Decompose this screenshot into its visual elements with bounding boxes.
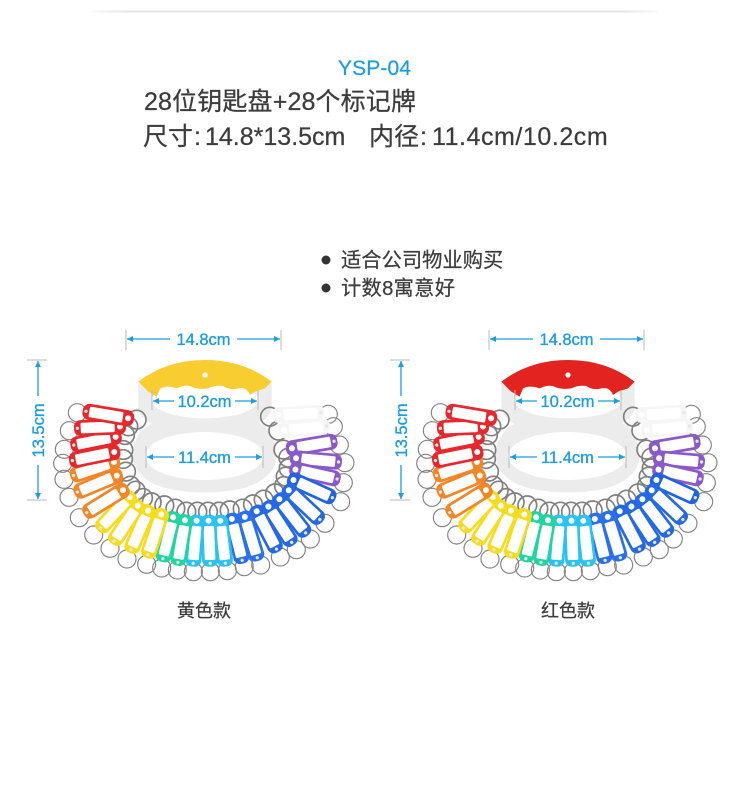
dimension: inner 10.2cm	[515, 390, 621, 411]
bullet: lucky number 8: 计数8寓意好	[341, 277, 455, 300]
product: yellow key tray	[27, 330, 354, 581]
top divider line	[92, 10, 658, 12]
dimension: width 14.8cm	[126, 330, 281, 350]
caption: red version: 红色款	[541, 601, 595, 621]
dimension: inner 11.4cm	[509, 446, 626, 468]
product description line: 28位钥匙盘+28个标记牌	[144, 88, 416, 116]
size specification line: 内径	[369, 123, 419, 151]
icon: red handle	[501, 360, 635, 397]
dimension: height 13.5cm: 13.5cm	[393, 403, 411, 458]
product: red key tray	[390, 330, 717, 581]
dimension: height 13.5cm	[27, 360, 48, 500]
size specification line: 11.4cm/10.2cm	[432, 123, 608, 151]
size specification line: :	[420, 123, 427, 151]
dimension: inner 10.2cm: 10.2cm	[540, 393, 595, 411]
size specification line: 尺寸	[143, 123, 193, 151]
dimension: inner 11.4cm	[146, 446, 263, 468]
dimension: height 13.5cm: 13.5cm	[30, 403, 48, 458]
dimension: inner 11.4cm: 11.4cm	[178, 449, 231, 467]
dimension: height 13.5cm	[390, 360, 411, 500]
dimension: width 14.8cm: 14.8cm	[176, 331, 231, 349]
key tags and plate	[417, 382, 717, 581]
model number: YSP-04	[338, 57, 411, 80]
dimension: width 14.8cm	[489, 330, 644, 350]
size specification line: 14.8*13.5cm	[205, 123, 345, 151]
dimension: inner 10.2cm: 10.2cm	[177, 393, 232, 411]
caption: yellow version: 黄色款	[177, 601, 231, 621]
bullet: suitable for companies: 适合公司物业购买	[341, 249, 503, 272]
icon: yellow handle	[138, 360, 272, 397]
dimension: width 14.8cm: 14.8cm	[539, 331, 594, 349]
dimension: inner 11.4cm: 11.4cm	[541, 449, 594, 467]
key tags and plate	[54, 382, 354, 581]
dimension: inner 10.2cm	[152, 390, 258, 411]
size specification line: :	[194, 123, 201, 151]
